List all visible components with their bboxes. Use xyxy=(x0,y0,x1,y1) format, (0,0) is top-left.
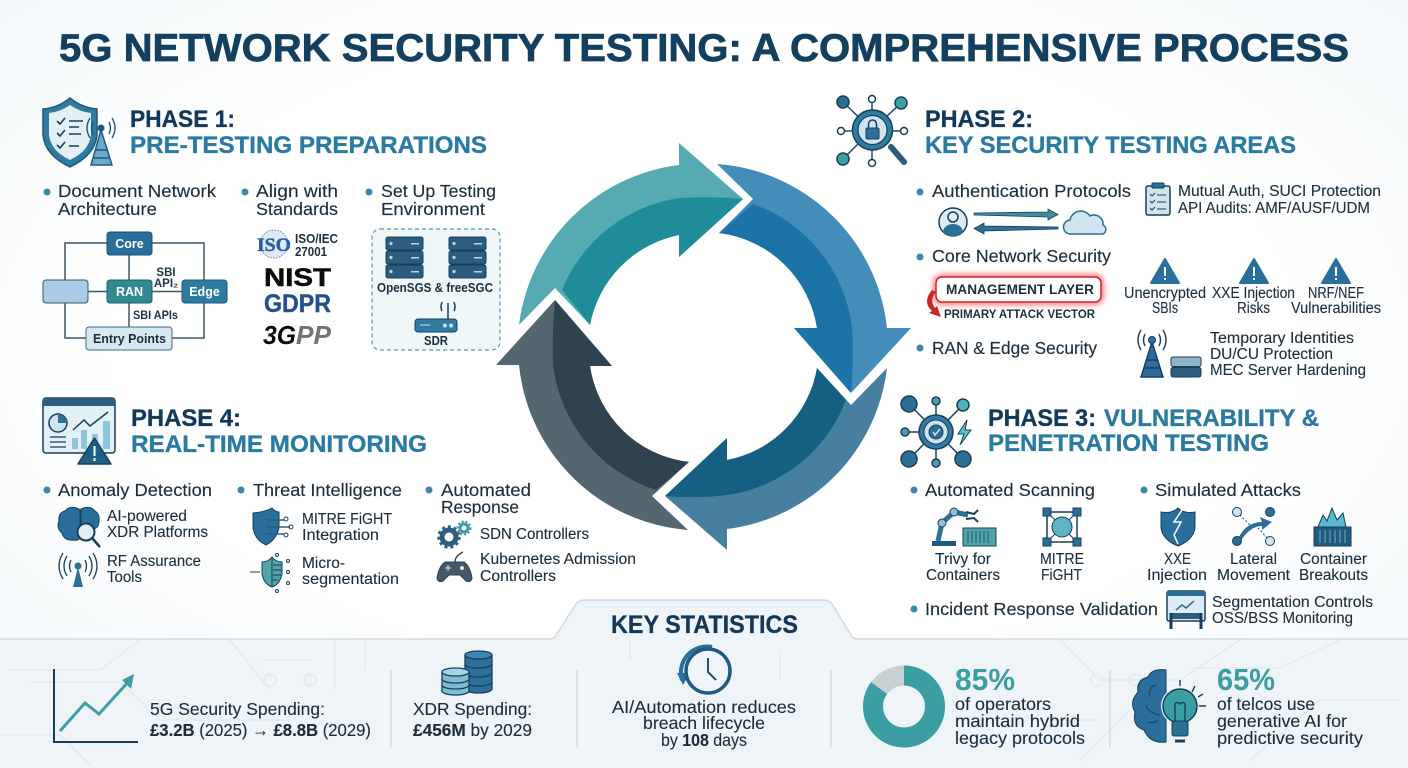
text: segmentation and monitoring: Segmentation Controls xyxy=(1212,594,1373,611)
text: trivy for containers xyxy=(926,551,1000,584)
stat: breach lifecycle: by 108 days xyxy=(661,730,747,750)
heading: phase 4 xyxy=(131,405,427,458)
text: align with standards: Standards xyxy=(256,199,338,219)
text: core network security: Core Network Security xyxy=(932,246,1111,266)
stat: 85 percent hybrid protocols: maintain hybrid xyxy=(955,711,1080,731)
text: segmentation and monitoring: OSS/BSS Monitoring xyxy=(1212,610,1353,627)
heading: phase 2: KEY SECURITY TESTING AREAS xyxy=(925,132,1296,159)
arrow: phase 1 teal xyxy=(519,143,743,325)
icon: micro-segmentation shield xyxy=(250,554,290,592)
text: container breakouts: Container xyxy=(1300,551,1367,568)
diagram: network architecture: Entry Points xyxy=(93,332,166,346)
icons: core network warnings: NRF/NEF xyxy=(1308,285,1364,302)
title: 5G NETWORK SECURITY TESTING: A COMPREHENSIVE PROCESS xyxy=(59,27,1349,70)
text: container breakouts xyxy=(1299,551,1368,584)
text: authentication details: API Audits: AMF/AUSF/UDM xyxy=(1178,200,1370,217)
text: lateral movement xyxy=(1217,551,1291,584)
icon: brain with magnifier xyxy=(58,507,100,547)
icon: user to cloud exchange xyxy=(939,208,1106,236)
icon: clipboard xyxy=(1146,183,1170,215)
stat: xdr spending xyxy=(413,651,532,740)
icon: tower and edge server xyxy=(1138,330,1201,377)
icons: core network warnings: Unencrypted xyxy=(1124,285,1206,302)
panel: test environment: SDR xyxy=(424,334,448,348)
text: anomaly detection: Anomaly Detection xyxy=(58,480,212,500)
donut chart xyxy=(873,676,935,738)
stat: breach lifecycle: AI/Automation reduces xyxy=(612,697,796,717)
diagram: network architecture: SBI xyxy=(156,267,176,279)
callout: management layer primary attack vector xyxy=(927,277,1101,321)
text: rf assurance tools: RF Assurance xyxy=(107,553,201,570)
stat: 65 percent generative ai xyxy=(1133,662,1363,748)
icon: container breakout xyxy=(1314,508,1351,546)
text: kubernetes admission controllers xyxy=(480,551,636,585)
icon: gamepad xyxy=(437,552,472,582)
heading: phase 2 xyxy=(925,106,1296,159)
heading: phase 3: VULNERABILITY & xyxy=(1104,405,1319,432)
text: container breakouts: Breakouts xyxy=(1299,567,1368,584)
icon: gears xyxy=(438,522,470,548)
text: trivy for containers: Trivy for xyxy=(935,551,991,568)
icon: cracked shield xyxy=(1161,508,1195,546)
logos: standards: ISO xyxy=(257,235,291,256)
stat: 5g security spending xyxy=(54,669,371,742)
diagram: network architecture: SBI APIs xyxy=(133,310,178,322)
text: document network architecture xyxy=(44,181,216,219)
text: ai-powered xdr platforms: XDR Platforms xyxy=(107,524,208,541)
heading: phase 1 xyxy=(130,106,487,159)
icons: core network warnings: Risks xyxy=(1237,300,1270,317)
text: set up testing environment: Set Up Testing xyxy=(381,181,496,201)
text: ran and edge security: RAN & Edge Security xyxy=(932,338,1097,358)
icon: rf antenna xyxy=(59,553,97,587)
text: document network architecture: Document Network xyxy=(58,181,216,201)
arrow: phase 4 slate xyxy=(496,300,689,530)
text: mitre fight integration: Integration xyxy=(302,527,379,544)
panel: test environment: OpenSGS & freeSGC xyxy=(377,280,494,295)
text: document network architecture: Architecture xyxy=(58,199,157,219)
text: incident response validation: Incident Response Validation xyxy=(925,599,1158,619)
text: mitre fight xyxy=(1040,551,1084,584)
heading: phase 1: PRE-TESTING PREPARATIONS xyxy=(130,132,487,159)
icons: core network warnings: XXE Injection xyxy=(1212,285,1295,302)
text: authentication details xyxy=(1178,183,1381,217)
diagram: network architecture: Edge xyxy=(189,285,220,299)
arrow: phase 3 steel blue xyxy=(665,368,887,550)
icon: shield with checklist and tower xyxy=(43,98,115,167)
heading: phase 3: PENETRATION TESTING xyxy=(988,430,1269,457)
text: micro-segmentation: segmentation xyxy=(302,571,399,588)
text: sdn controllers: SDN Controllers xyxy=(480,526,589,543)
stat: 65 percent generative ai: of telcos use xyxy=(1217,694,1315,714)
heading: phase 1: PHASE 1: xyxy=(130,106,235,133)
diagram: network architecture: API₂ xyxy=(154,278,178,290)
heading: phase 3: PHASE 3: xyxy=(988,405,1096,432)
text: rf assurance tools: Tools xyxy=(107,569,142,586)
stat: breach lifecycle xyxy=(612,646,796,750)
text: ran details xyxy=(1210,330,1366,379)
icon: mitre fight grid xyxy=(1043,508,1081,546)
stat: breach lifecycle: breach lifecycle xyxy=(643,713,765,733)
heading: key statistics: KEY STATISTICS xyxy=(611,611,798,639)
logos: standards xyxy=(257,230,338,350)
text: xxe injection xyxy=(1147,551,1207,584)
stat: 65 percent generative ai: 65% xyxy=(1217,662,1275,697)
stat: 85 percent hybrid protocols xyxy=(873,662,1085,748)
text: mitre fight integration xyxy=(302,511,392,544)
stat: 65 percent generative ai: predictive security xyxy=(1217,728,1363,748)
stat: xdr spending: XDR Spending: xyxy=(413,699,532,719)
icon: target network with bolt xyxy=(901,396,971,467)
panel: test environment xyxy=(372,229,500,350)
icons: core network warnings: Vulnerabilities xyxy=(1291,300,1381,317)
icons: core network warnings xyxy=(1124,259,1381,317)
text: threat intelligence: Threat Intelligence xyxy=(253,480,402,500)
heading: phase 4: PHASE 4: xyxy=(131,405,241,432)
icon: robot arm and container xyxy=(932,508,996,546)
panel: phase 2 key security testing areas xyxy=(837,96,1381,379)
logos: standards: 3G xyxy=(263,320,296,350)
text: kubernetes admission controllers: Controllers xyxy=(480,568,556,585)
text: automated response: Automated xyxy=(441,480,531,500)
text: align with standards: Align with xyxy=(256,181,338,201)
stat: 5g security spending: 5G Security Spending: xyxy=(150,699,325,719)
panel: phase 4 real-time monitoring xyxy=(43,398,636,592)
text: ran details: Temporary Identities xyxy=(1210,330,1354,347)
cycle diagram: four circular arrows xyxy=(496,143,911,550)
icon: monitor with barrier xyxy=(1167,591,1205,629)
stat: 85 percent hybrid protocols: 85% xyxy=(955,662,1015,697)
text: ran details: MEC Server Hardening xyxy=(1210,362,1366,379)
text: simulated attacks: Simulated Attacks xyxy=(1155,480,1301,500)
icon: circuit shield xyxy=(253,508,293,545)
text: micro-segmentation: Micro- xyxy=(302,555,345,572)
heading: phase 4: REAL-TIME MONITORING xyxy=(131,431,427,458)
text: set up testing environment xyxy=(366,181,496,219)
footer background with tab xyxy=(0,600,1408,768)
callout: management layer primary attack vector: PRIMARY ATTACK VECTOR xyxy=(944,307,1095,321)
text: xxe injection: Injection xyxy=(1147,567,1207,584)
text: automated scanning: Automated Scanning xyxy=(925,480,1095,500)
text: ai-powered xdr platforms xyxy=(107,508,208,541)
heading: phase 2: PHASE 2: xyxy=(925,106,1033,133)
callout: management layer primary attack vector: MANAGEMENT LAYER xyxy=(946,281,1094,297)
text: mitre fight integration: MITRE FiGHT xyxy=(302,511,392,528)
icon: lateral movement xyxy=(1232,508,1274,546)
diagram: network architecture: RAN xyxy=(116,285,143,299)
text: lateral movement: Lateral xyxy=(1230,551,1277,568)
text: rf assurance tools xyxy=(107,553,201,586)
icons: core network warnings: SBIs xyxy=(1152,300,1178,317)
logos: standards: GDPR xyxy=(264,290,331,318)
icon: network nodes with padlock magnifier xyxy=(837,96,908,166)
panel: phase 1 pre-testing preparations xyxy=(43,98,500,350)
text: align with standards xyxy=(242,181,338,219)
text: mitre fight: MITRE xyxy=(1040,551,1084,568)
stat: 85 percent hybrid protocols: of operators xyxy=(955,694,1051,714)
text: automated response xyxy=(426,480,531,517)
diagram: network architecture: Core xyxy=(115,237,144,251)
text: authentication details: Mutual Auth, SUCI Protection xyxy=(1178,183,1381,200)
stat: 85 percent hybrid protocols: legacy protocols xyxy=(955,728,1085,748)
stat: 5g security spending: £3.2B (2025) → £8.8B (2029) xyxy=(150,720,371,740)
stat: 65 percent generative ai: generative AI for xyxy=(1217,711,1347,731)
text: set up testing environment: Environment xyxy=(381,199,485,219)
heading: phase 3 xyxy=(988,405,1319,457)
text: mitre fight: FiGHT xyxy=(1041,567,1082,584)
text: authentication protocols: Authentication Protocols xyxy=(932,181,1131,201)
arrow: phase 2 blue xyxy=(717,164,911,393)
icon: dashboard with alert xyxy=(43,398,115,464)
diagram: network architecture xyxy=(43,232,227,350)
logos: standards: NIST xyxy=(264,264,331,292)
text: automated response: Response xyxy=(441,497,519,517)
text: segmentation and monitoring xyxy=(1212,594,1373,627)
text: ai-powered xdr platforms: AI-powered xyxy=(107,508,187,525)
text: xxe injection: XXE xyxy=(1164,551,1191,568)
logos: standards: ISO/IEC xyxy=(295,232,338,246)
text: ran details: DU/CU Protection xyxy=(1210,346,1333,363)
text: kubernetes admission controllers: Kubernetes Admission xyxy=(480,551,636,568)
logos: standards: PP xyxy=(296,320,332,350)
stat: xdr spending: £456M by 2029 xyxy=(413,720,532,740)
text: lateral movement: Movement xyxy=(1217,567,1291,584)
panel: key statistics footer xyxy=(0,600,1408,768)
text: trivy for containers: Containers xyxy=(926,567,1000,584)
text: micro-segmentation xyxy=(302,555,399,588)
logos: standards: 27001 xyxy=(295,245,327,259)
panel: phase 3 vulnerability and penetration testing xyxy=(901,396,1373,629)
